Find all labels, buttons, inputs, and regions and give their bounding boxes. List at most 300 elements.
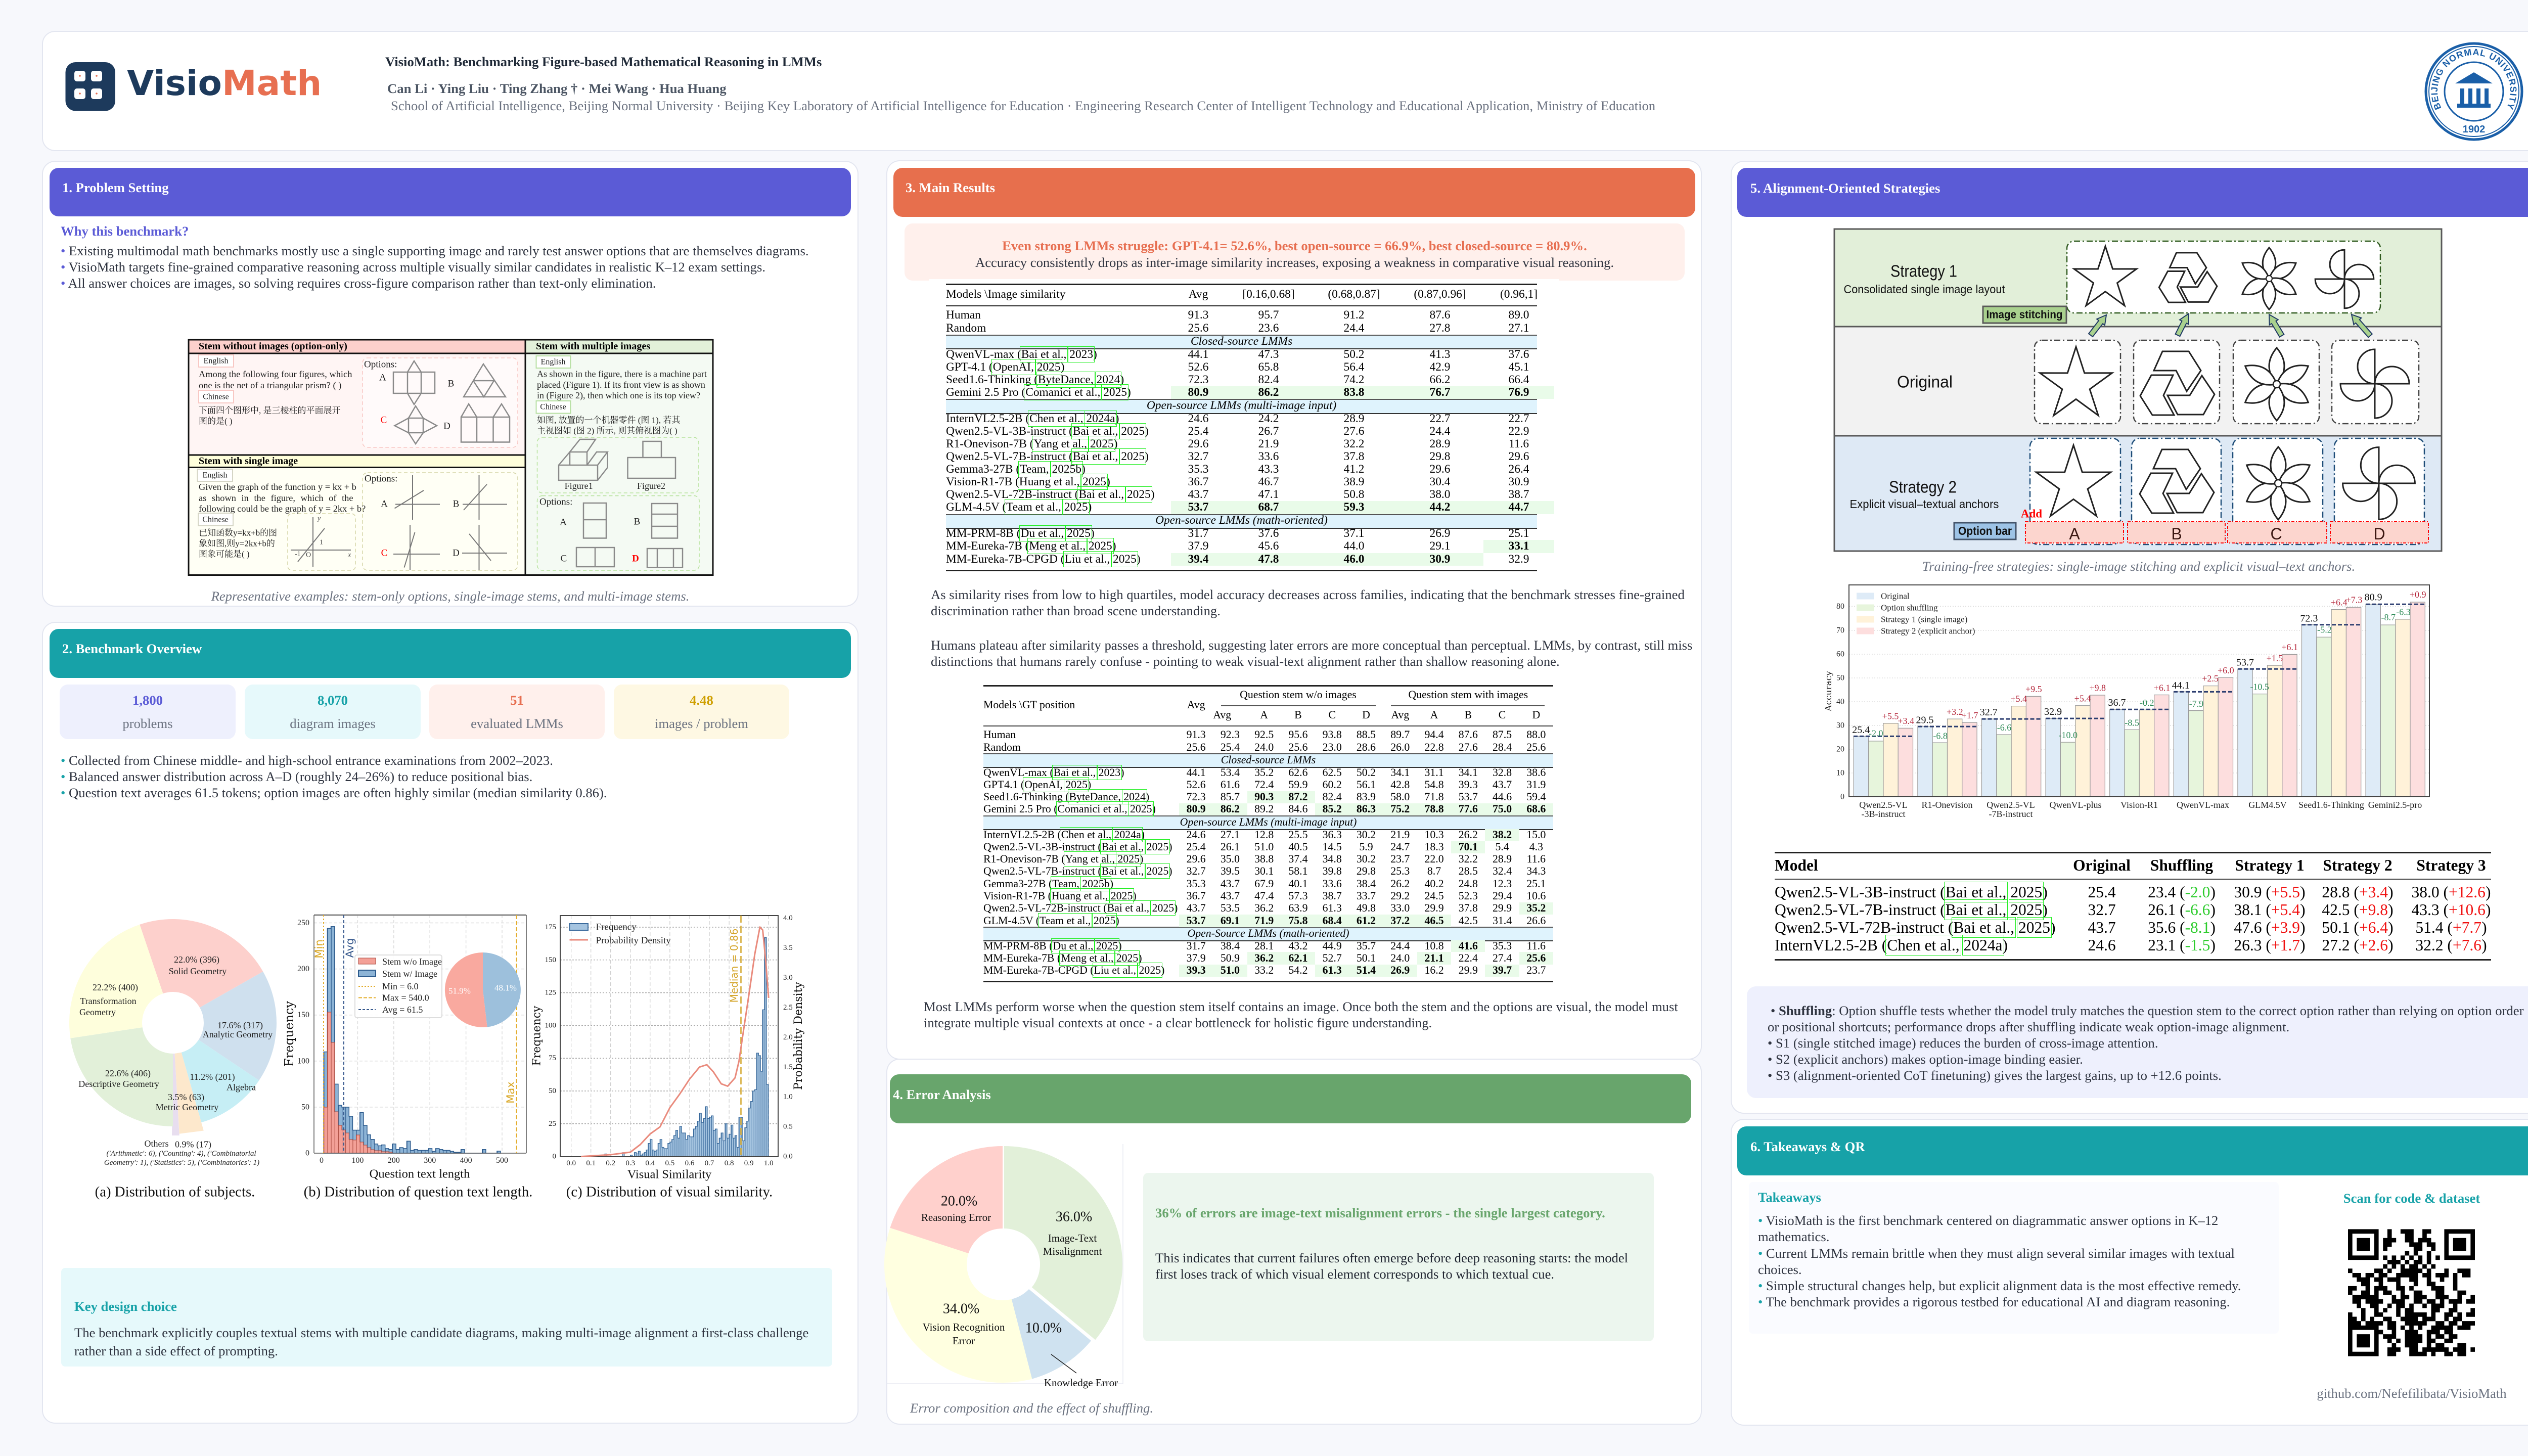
legend: Stem w/ Image [382,969,437,979]
table: strategy comparison: 26.3 (+1.7) [2234,936,2306,954]
stem with multiple images: 主视图如 (图 2) 所示, 则其俯视图为( ) [537,426,678,436]
table: accuracy by GT position: 62.6 [1288,766,1308,779]
table: strategy comparison: 43.3 (+10.6) [2412,901,2491,919]
table: accuracy by GT position: 25.6 [1526,741,1546,753]
table: accuracy by GT position: 39.8 [1323,865,1342,877]
table: accuracy by GT position: 37.9 [1187,952,1206,964]
table: accuracy by GT position: 24.8 [1459,878,1478,890]
callout headline: Even strong LMMs struggle: GPT-4.1= 52.6%, best open-source = 66.9%, best closed-source = 80.9%. [1002,238,1587,253]
tick labels: 0.7 [705,1159,714,1167]
tick labels: 0.8 [725,1159,734,1167]
row: strategy 1: Strategy 1 [1890,262,1957,280]
stem with single image: C [381,548,387,558]
shuffling delta labels: -10.0 [2059,730,2078,740]
strategy delta labels: +3.4 [1898,716,1914,726]
stem with single image: following could be the graph of y = 2kx + b? [199,504,366,514]
stem with single image: y [317,515,321,523]
table: accuracy by GT position: 68.4 [1323,915,1342,927]
table: accuracy by image similarity: 27.6 [1344,425,1364,438]
table: accuracy by GT position: 30.2 [1357,829,1376,841]
table: accuracy by image similarity: 37.8 [1344,450,1364,463]
table: accuracy by image similarity: 72.3 [1188,373,1208,386]
table: accuracy by GT position: 61.3 [1323,902,1342,914]
stem without images: English [204,357,228,365]
table: accuracy by GT position: Question stem with images [1408,689,1528,701]
table: accuracy by GT position: 34.1 [1390,766,1410,779]
table: accuracy by GT position: 75.8 [1288,915,1308,927]
tick labels: 100 [297,1057,309,1065]
category labels: Seed1.6-Thinking [2298,800,2364,810]
slice labels: Others [145,1139,169,1149]
table: strategy comparison: 35.6 (-8.1) [2148,919,2216,936]
figure: representative examples [188,339,714,576]
median label: Median = 0.86 [728,929,740,1003]
stem without images: Among the following four figures, which [199,369,352,379]
tick labels: 50 [301,1103,309,1111]
legend: Probability Density [596,935,671,946]
takeaways heading: Takeaways [1758,1190,1821,1205]
stem with multiple images: A [560,517,567,528]
table: accuracy by GT position: 26.9 [1390,964,1410,976]
table: accuracy by image similarity: 65.8 [1258,360,1279,374]
table: accuracy by image similarity: 47.3 [1258,348,1279,361]
category labels: Vision-R1 [2120,800,2158,810]
tick labels: 25 [549,1120,556,1128]
table: accuracy by image similarity: MM-Eureka-7B (Meng et al., 2025) [946,539,1116,553]
table: accuracy by GT position: 58.1 [1288,865,1308,877]
table: accuracy by GT position: 31.9 [1526,779,1546,791]
tick labels: 250 [297,919,309,927]
strategy notes text: or positional shortcuts; performance drops after shuffling indicate weak option-image alignment. [1768,1019,2289,1034]
stem with single image: 已知函数y=kx+b的图 [199,528,277,538]
table: accuracy by image similarity: 24.4 [1430,425,1450,438]
table: accuracy by GT position: 28.6 [1357,741,1376,753]
stem with single image: D [453,548,460,558]
original value labels: 32.7 [1980,707,1998,718]
tick labels: 500 [496,1156,508,1165]
table: accuracy by GT position: GPT4.1 (OpenAI, 2025) [983,779,1091,791]
tick labels: 400 [460,1156,472,1165]
table: accuracy by GT position: 34.8 [1323,853,1342,865]
callout body [74,1325,808,1358]
strategy delta labels: +2.5 [2202,673,2219,684]
shuffling delta labels: -5.2 [2317,625,2332,635]
strategy delta labels: +1.7 [1962,710,1978,720]
stem with single image: 象如图,则y=2kx+b的 [199,539,275,548]
stem with single image: Given the graph of the function y = kx + b [199,482,356,492]
table: accuracy by GT position: 92.5 [1254,729,1274,741]
table: accuracy by GT position: 38.2 [1493,829,1512,841]
table: accuracy by GT position: 35.0 [1221,853,1240,865]
table: accuracy by GT position: Avg [1391,709,1409,721]
table: accuracy by GT position: 61.2 [1357,915,1376,927]
callout explanation: Accuracy consistently drops as inter-image similarity increases, exposing a weakness in comparative visual reasoning. [975,255,1614,270]
axis labels: 40 [1836,698,1844,706]
callout: misalignment finding [1143,1173,1654,1341]
table: accuracy by GT position: 28.5 [1459,865,1478,877]
chart: distribution of question text length [282,914,532,1200]
strategy notes text: • S1 (single stitched image) reduces the burden of cross-image attention. [1768,1035,2158,1051]
heading: 5. Alignment-Oriented Strategies: 5. Alignment-Oriented Strategies [1750,180,1940,196]
table: accuracy by image similarity: Qwen2.5-VL-3B-instruct (Bai et al., 2025) [946,425,1149,438]
table: accuracy by image similarity: 52.6 [1188,360,1208,374]
table: accuracy by GT position: 35.3 [1493,940,1512,952]
takeaways list: • The benchmark provides a rigorous testbed for educational AI and diagram reasoning. [1758,1294,2230,1309]
panel: error analysis [887,1060,1701,1424]
table: accuracy by GT position: 91.3 [1187,729,1206,741]
table: accuracy by GT position: 34.3 [1526,865,1546,877]
category labels: Qwen2.5-VL [1859,800,1908,810]
table: accuracy by GT position: 4.3 [1529,841,1543,853]
table: accuracy by GT position: 21.1 [1424,952,1444,964]
takeaways list: choices. [1758,1262,1802,1277]
slice labels: ('Arithmetic': 6), ('Counting': 4), ('Combinatorial [106,1150,256,1158]
tick labels: 1.0 [783,1093,793,1101]
table: accuracy by GT position: 33.0 [1390,902,1410,914]
table: accuracy by GT position: 54.8 [1424,779,1444,791]
heading: 5. Alignment-Oriented Strategies [1737,168,2528,217]
row: strategy 2: Add [2021,508,2042,520]
table: accuracy by image similarity: 33.1 [1509,539,1529,553]
table: accuracy by GT position: 72.3 [1187,791,1206,803]
table: accuracy by image similarity: 53.7 [1188,500,1208,514]
panel: alignment-oriented strategies [1732,162,2528,1113]
authors: Can Li · Ying Liu · Ting Zhang † · Mei Wang · Hua Huang [387,81,727,96]
table: accuracy by image similarity: Models \Image similarity [946,288,1065,301]
table: accuracy by GT position: C [1328,709,1336,721]
bullet list: dataset facts [61,753,607,800]
heading: 4. Error Analysis: 4. Error Analysis [893,1087,991,1102]
table: accuracy by GT position: 36.2 [1254,902,1274,914]
table: accuracy by image similarity: 25.6 [1188,322,1208,335]
table: accuracy by GT position: 85.7 [1221,791,1240,803]
table: accuracy by GT position: Closed-source LMMs [1221,754,1316,766]
table: accuracy by GT position: 39.3 [1187,964,1206,976]
legend [1857,592,1975,636]
table: accuracy by image similarity: 22.7 [1430,412,1450,425]
shuffling delta labels: -10.5 [2250,681,2269,692]
table: strategy comparison: 28.8 (+3.4) [2322,883,2394,901]
table: accuracy by GT position: 22.8 [1424,741,1444,753]
axis labels: 10 [1836,768,1844,778]
table: accuracy by GT position: 85.2 [1323,803,1342,815]
table: accuracy by GT position: 40.5 [1288,841,1308,853]
table: accuracy by image similarity: 29.8 [1430,450,1450,463]
table: accuracy by GT position: 49.8 [1357,902,1376,914]
header card [43,32,2528,150]
table: accuracy by GT position: 94.4 [1424,729,1444,741]
table: accuracy by image similarity: 32.2 [1344,437,1364,450]
reference lines [324,915,517,1153]
table: accuracy by image similarity: 25.4 [1188,425,1208,438]
strategy delta labels: +6.4 [2331,598,2348,608]
callout heading: Key design choice [74,1299,177,1314]
table: accuracy by image similarity: 43.3 [1258,463,1279,476]
paragraph: humans vs models: distinctions that humans rarely confuse - pointing to weak visual-text alignment rather than shallow reasoning alone. [931,654,1560,669]
caption: error composition: Error composition and the effect of shuffling. [910,1400,1153,1416]
table: accuracy by GT position: 5.9 [1359,841,1373,853]
paragraph: similarity trend: discrimination rather than broad scene understanding. [931,603,1221,618]
tick labels: 200 [297,965,309,973]
table: accuracy by GT position: 43.7 [1187,902,1206,914]
table: accuracy by GT position: 26.2 [1390,878,1410,890]
table: accuracy by GT position: 5.4 [1495,841,1509,853]
table: accuracy by GT position: 89.2 [1254,803,1274,815]
table: accuracy by image similarity: 41.3 [1430,348,1450,361]
table: accuracy by image similarity: 29.1 [1430,539,1450,553]
category labels: -7B-instruct [1989,809,2033,819]
strategy delta labels: +1.5 [2267,653,2283,663]
table: accuracy by GT position: 95.6 [1288,729,1308,741]
table: accuracy by image similarity: 35.3 [1188,463,1208,476]
table: accuracy by GT position: 88.0 [1526,729,1546,741]
table: accuracy by image similarity: 26.4 [1509,463,1529,476]
table: accuracy by GT position: 28.4 [1493,741,1512,753]
table: accuracy by GT position: 30.1 [1254,865,1274,877]
table: accuracy by GT position: 35.2 [1254,766,1274,779]
table: accuracy by GT position: 11.6 [1527,853,1546,865]
table: accuracy by image similarity: 26.9 [1430,527,1450,540]
table: strategy comparison: Qwen2.5-VL-7B-instruct (Bai et al., 2025) [1775,901,2048,919]
heading: 1. Problem Setting [50,168,851,216]
table: accuracy by GT position: 14.5 [1323,841,1342,853]
table: accuracy by image similarity: 29.6 [1188,437,1208,450]
strategy notes text: • S3 (alignment-oriented CoT finetuning) gives the largest gains, up to +12.6 points. [1768,1068,2222,1083]
table: accuracy by image similarity: 47.8 [1258,553,1279,566]
chart: distribution of subjects [69,919,277,1200]
donut labels: 20.0% [941,1193,977,1209]
slice labels: 11.2% (201) [190,1072,235,1082]
tick labels: 0 [320,1156,324,1165]
density curve [581,927,769,1157]
table: accuracy by image similarity: 46.0 [1344,553,1364,566]
stat: evaluated LMMs: evaluated LMMs [471,716,563,731]
table: accuracy by GT position: 39.3 [1459,779,1478,791]
table: accuracy by GT position: 25.6 [1288,741,1308,753]
table: accuracy by GT position: 29.9 [1493,902,1512,914]
table: accuracy by image similarity: 22.9 [1509,425,1529,438]
table: accuracy by GT position: 63.9 [1288,902,1308,914]
paragraph: stem images [924,999,1678,1030]
original value labels: 25.4 [1852,724,1870,736]
bullet list: motivation: • All answer choices are images, so solving requires cross-figure comparison rather than text-only elimination. [61,276,656,291]
inset pie [445,952,521,1027]
table: accuracy by GT position: 29.2 [1390,890,1410,902]
table: accuracy by image similarity: 36.7 [1188,475,1208,488]
table: accuracy by GT position: 80.9 [1187,803,1206,815]
shuffling delta labels: -0.2 [2140,698,2154,708]
table: accuracy by image similarity: 26.7 [1258,425,1279,438]
table: accuracy by GT position: 50.9 [1221,952,1240,964]
callout body: rather than a side effect of prompting. [74,1343,278,1358]
table: accuracy by GT position: MM-Eureka-7B (Meng et al., 2025) [983,952,1142,964]
paragraph: humans vs models [931,638,1692,669]
table: accuracy by GT position: 86.3 [1357,803,1376,815]
table: accuracy by GT position: 38.6 [1526,766,1546,779]
table: accuracy by GT position: 26.0 [1390,741,1410,753]
histogram bars [605,938,769,1157]
table: accuracy by GT position: 11.6 [1527,940,1546,952]
stem with single image: -1 [295,550,301,558]
table: accuracy by GT position: 32.4 [1493,865,1512,877]
table: accuracy by GT position: 31.1 [1424,766,1444,779]
donut labels: Image-Text [1048,1232,1097,1244]
bullet list: motivation [61,243,809,291]
table: accuracy by GT position: 24.6 [1187,829,1206,841]
original value labels: 72.3 [2300,613,2318,624]
table: accuracy by image similarity: 22.7 [1509,412,1529,425]
slice labels: Descriptive Geometry [78,1079,159,1089]
chart: strategy accuracy bars [1820,581,2447,824]
axis labels: 30 [1836,721,1844,730]
table: accuracy by GT position: 30.2 [1357,853,1376,865]
table: strategy comparison: 25.4 [2088,883,2116,901]
table: accuracy by image similarity: Avg [1189,288,1208,301]
heading: 2. Benchmark Overview: 2. Benchmark Overview [62,641,202,656]
table: accuracy by image similarity: QwenVL-max (Bai et al., 2023) [946,348,1097,361]
takeaways list: • VisioMath is the first benchmark centered on diagrammatic answer options in K–12 [1758,1213,2218,1228]
tick labels: 75 [549,1054,556,1062]
table: accuracy by image similarity: 32.9 [1509,553,1529,566]
table: accuracy by image similarity: MM-PRM-8B (Du et al., 2025) [946,527,1095,540]
table: accuracy by GT position: 84.6 [1288,803,1308,815]
table: accuracy by GT position: 25.5 [1288,829,1308,841]
table: accuracy by GT position: B [1465,709,1472,721]
category labels: Qwen2.5-VL [1987,800,2035,810]
callout body: This indicates that current failures often emerge before deep reasoning starts: the model [1155,1250,1628,1265]
table: accuracy by GT position: 39.5 [1221,865,1240,877]
donut labels: Error [953,1335,975,1347]
donut labels: 36.0% [1056,1209,1092,1224]
table: accuracy by GT position: 71.9 [1254,915,1274,927]
table: accuracy by image similarity: 47.1 [1258,488,1279,501]
table: accuracy by image similarity: 44.0 [1344,539,1364,553]
logo wordmark: VisioMath [127,63,322,104]
strategy delta labels: +6.1 [2154,682,2170,693]
table: accuracy by image similarity: 44.1 [1188,348,1208,361]
table: strategy comparison: Strategy 1 [2235,856,2305,874]
row: strategy 2: Strategy 2 [1889,477,1957,496]
row: strategy 2: A [2069,525,2080,543]
tick labels: 0.1 [586,1159,596,1167]
shuffling delta labels: -6.8 [1933,731,1948,741]
table: accuracy by image similarity: 76.9 [1509,386,1529,399]
table: accuracy by GT position: 27.4 [1493,952,1512,964]
original value labels [1852,592,2382,736]
table: accuracy by GT position: 24.0 [1390,952,1410,964]
table: accuracy by image similarity: 42.9 [1430,360,1450,374]
row: strategy 2: D [2373,525,2385,543]
table: accuracy by image similarity: 50.8 [1344,488,1364,501]
table: accuracy by image similarity: 25.1 [1509,527,1529,540]
table: accuracy by GT position: 28.1 [1254,940,1274,952]
axis titles: Frequency [282,1001,296,1067]
tick labels: 3.5 [783,944,793,952]
table: accuracy by GT position: 43.7 [1221,878,1240,890]
table: accuracy by GT position: 62.1 [1288,952,1308,964]
shuffling delta labels [1869,607,2411,741]
axis labels: 50 [1836,673,1844,682]
original value labels: 80.9 [2365,592,2382,603]
table: accuracy by GT position: A [1430,709,1438,721]
table: accuracy by image similarity: 24.6 [1188,412,1208,425]
table: accuracy by GT position: 10.3 [1424,829,1444,841]
table: strategy comparison: 32.2 (+7.6) [2415,936,2487,954]
table: accuracy by GT position: 35.2 [1526,902,1546,914]
table: accuracy by GT position: 77.6 [1459,803,1478,815]
table: accuracy by GT position: 25.6 [1187,741,1206,753]
axis titles: Question text length [370,1167,470,1181]
stem without images: Options: [364,359,397,370]
strategy delta labels: +5.4 [2074,694,2091,704]
table: accuracy by GT position: 35.3 [1187,878,1206,890]
table: accuracy by GT position: 37.2 [1390,915,1410,927]
strategy delta labels: +6.0 [2218,665,2234,675]
heading: 4. Error Analysis [890,1074,1691,1123]
row: strategy 2: Explicit visual–textual anchors [1849,497,1999,511]
table: accuracy by image similarity: 87.6 [1430,308,1450,322]
heading: 1. Problem Setting: 1. Problem Setting [62,180,169,195]
table: accuracy by GT position: 29.6 [1187,853,1206,865]
tick labels: 0.9 [744,1159,753,1167]
table: accuracy by GT position: 47.4 [1254,890,1274,902]
tick labels: 100 [545,1021,556,1029]
arrows: stitching [2089,314,2372,337]
table: accuracy by GT position: Seed1.6-Thinking (ByteDance, 2024) [983,791,1149,803]
table: accuracy by GT position: 93.8 [1323,729,1342,741]
table: accuracy by GT position: 40.2 [1424,878,1444,890]
shuffling delta labels: -8.5 [2125,717,2139,727]
stem with multiple images: placed (Figure 1). If its front view is as shown [537,380,705,390]
table: accuracy by image similarity: 44.2 [1430,500,1450,514]
legend: Stem w/o Image [382,957,442,967]
chart: distribution of visual similarity [531,914,805,1200]
tick labels: 0.0 [783,1153,793,1161]
table: accuracy by GT position: Qwen2.5-VL-7B-instruct (Bai et al., 2025) [983,865,1172,877]
table: accuracy by image similarity: 76.7 [1430,386,1450,399]
table: accuracy by image similarity: 89.0 [1509,308,1529,322]
stat: problems: problems [122,716,173,731]
table: accuracy by GT position: 53.7 [1187,915,1206,927]
table: accuracy by GT position: 58.0 [1390,791,1410,803]
table: accuracy by image similarity: GLM-4.5V (Team et al., 2025) [946,500,1092,514]
repository link: github.com/Nefefilibata/VisioMath [2317,1386,2507,1401]
table: accuracy by image similarity: 44.7 [1509,500,1529,514]
bars [1854,602,2425,797]
rotated line labels: Min [313,939,325,959]
table: accuracy by image similarity: Gemini 2.5 Pro (Comanici et al., 2025) [946,386,1131,399]
stem with multiple images: Options: [539,496,572,508]
table: accuracy by GT position: 57.3 [1288,890,1308,902]
table: accuracy by image similarity: 95.7 [1258,308,1279,322]
table: strategy comparison: 23.1 (-1.5) [2148,936,2216,954]
table: accuracy by image similarity: 56.4 [1344,360,1364,374]
donut labels: 34.0% [943,1301,979,1316]
stem with single image [197,456,518,570]
table: strategy comparison: 27.2 (+2.6) [2322,936,2394,954]
rotated line labels: Avg [344,938,356,958]
table: accuracy by GT position: 33.7 [1357,890,1376,902]
table: accuracy by GT position: 44.6 [1493,791,1512,803]
heading: 3. Main Results: 3. Main Results [906,180,995,195]
caption a: (a) Distribution of subjects. [95,1184,255,1200]
table: accuracy by GT position: 54.2 [1288,964,1308,976]
table: accuracy by GT position: 88.5 [1357,729,1376,741]
strategy delta labels: +5.4 [2010,694,2027,704]
table: accuracy by GT position: 51.0 [1221,964,1240,976]
table: accuracy by GT position: 29.4 [1493,890,1512,902]
tick labels: 2.0 [783,1033,793,1041]
